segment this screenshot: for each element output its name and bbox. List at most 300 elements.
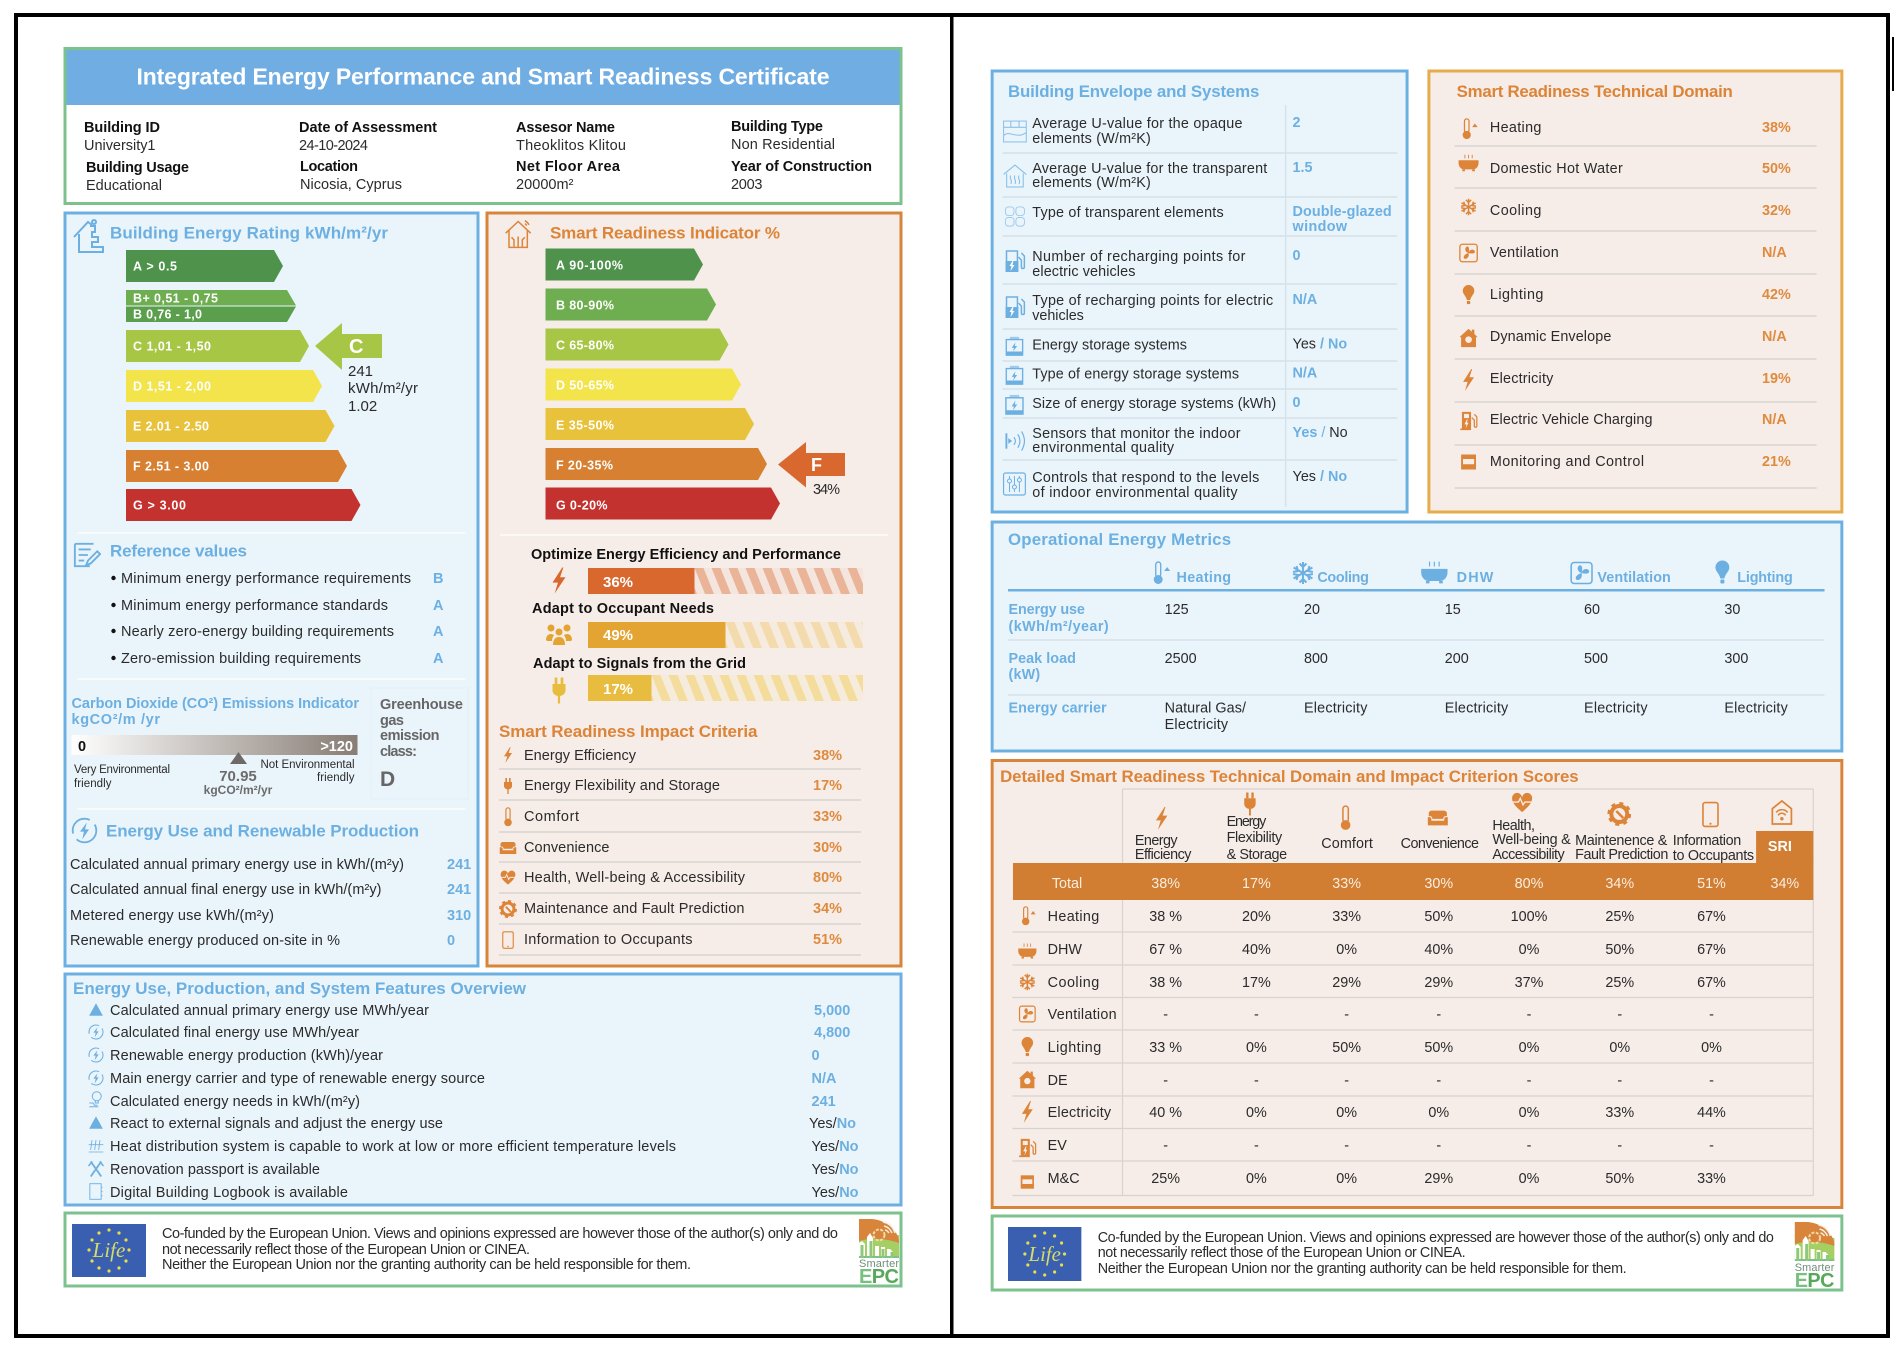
row: cooling: 17% [1242, 975, 1271, 991]
rating scale bars [126, 250, 360, 521]
SRI scale bars: G 0-20% [556, 499, 608, 513]
icon: Smarter EPC logo: EPC [1795, 1270, 1834, 1292]
CO2 emissions indicator: friendly [317, 772, 355, 784]
impact criteria list: 34% [813, 901, 842, 917]
row: heating: 38 % [1149, 909, 1182, 925]
row: cooling [1020, 974, 1726, 991]
panel: smart readiness indicator [487, 213, 901, 966]
overview rows: N/A [812, 1071, 837, 1087]
column headers with icons: Well-being & [1492, 832, 1571, 848]
SRI scale bars: E 35-50% [556, 419, 614, 433]
building details: University1 [84, 138, 156, 154]
building details [84, 119, 872, 194]
row: EV: - [1344, 1138, 1349, 1154]
building details: Building Type [731, 119, 823, 135]
energy use rows: Calculated annual primary energy use in kWh/(m²y) [70, 857, 404, 873]
icon: EU LIFE flag: Life [92, 1238, 125, 1262]
row: EV: - [1254, 1138, 1259, 1154]
technical domain rows: Ventilation [1490, 245, 1559, 261]
technical domain rows: Cooling [1490, 203, 1541, 219]
table header: Heating [1177, 570, 1231, 586]
row: heating: 67% [1697, 909, 1726, 925]
row: ventilation: - [1254, 1007, 1259, 1023]
envelope rows: Number of recharging points for [1032, 249, 1246, 265]
envelope rows: Type of energy storage systems [1032, 366, 1239, 383]
building details: 20000m² [516, 177, 574, 193]
reference values list: Nearly zero-energy building requirements [121, 624, 394, 640]
icon: reference note [75, 544, 100, 566]
building details: Non Residential [731, 137, 835, 153]
envelope rows: Controls that respond to the levels [1032, 470, 1259, 486]
building details: Nicosia, Cyprus [300, 177, 402, 193]
row: M&C: 25% [1151, 1171, 1180, 1187]
heading: smart readiness indicator: Smart Readiness Indicator % [550, 224, 780, 242]
row: lighting [1022, 1037, 1722, 1056]
row: energy use: (kWh/m²/year) [1008, 619, 1109, 635]
reference values list: Zero-emission building requirements [121, 651, 361, 667]
row: electricity: Electricity [1048, 1105, 1112, 1121]
overview rows: Yes/No [812, 1185, 859, 1201]
greenhouse gas emission class: Greenhouse [380, 697, 463, 713]
technical domain rows: 38% [1762, 120, 1791, 136]
envelope rows: Yes / No [1293, 336, 1347, 353]
building details: Theoklitos Klitou [516, 138, 626, 154]
row: cooling: 29% [1424, 975, 1453, 991]
row: ventilation: - [1617, 1007, 1622, 1023]
row: lighting: 0% [1246, 1040, 1267, 1056]
rating scale bars: C 1,01 - 1,50 [133, 340, 211, 354]
greenhouse gas emission class: emission [380, 728, 440, 744]
column headers with icons: Flexibility [1227, 830, 1283, 846]
row: energy carrier: Energy carrier [1008, 700, 1107, 717]
envelope rows: Yes / No [1293, 469, 1347, 485]
row: energy use [1008, 602, 1740, 635]
overview rows: Yes/No [812, 1139, 859, 1155]
CO2 emissions indicator: Carbon Dioxide (CO²) Emissions Indicator [72, 696, 359, 712]
disclaimer text: Co-funded by the European Union. Views and opinions expressed are however those of the author(s) only and do [1098, 1230, 1774, 1246]
technical domain rows: N/A [1762, 245, 1787, 261]
envelope rows: 2 [1293, 115, 1301, 131]
reference values list: A [433, 624, 444, 640]
heading: reference values: Reference values [110, 542, 247, 560]
row: heating: 50% [1424, 909, 1453, 925]
envelope rows: Size of energy storage systems (kWh) [1032, 396, 1276, 412]
row: EV: - [1436, 1138, 1441, 1154]
envelope rows: window [1292, 219, 1348, 235]
row: DHW: 0% [1519, 942, 1540, 958]
rating scale bars: F 2.51 - 3.00 [133, 460, 209, 474]
row: ventilation: - [1436, 1007, 1441, 1023]
row: heating: 33% [1332, 909, 1361, 925]
table header: DHW [1457, 570, 1494, 586]
energy use rows [70, 857, 471, 949]
technical domain rows: 19% [1762, 371, 1791, 387]
overview rows: Yes/No [809, 1116, 856, 1132]
technical domain rows: 21% [1762, 454, 1791, 470]
envelope rows: Average U-value for the opaque [1032, 116, 1242, 132]
row: EV: - [1527, 1138, 1532, 1154]
row: lighting: 50% [1332, 1040, 1361, 1056]
row: electricity: 40 % [1149, 1105, 1182, 1121]
chart: adapt to signals from the grid: 17% [603, 681, 633, 698]
disclaimer text: Co-funded by the European Union. Views and opinions expressed are however those of the author(s) only and do [162, 1226, 838, 1242]
chart: adapt to occupant needs: 49% [603, 627, 633, 644]
row: electricity: 0% [1246, 1105, 1267, 1121]
disclaimer text: Neither the European Union nor the granting authority can be held responsible for them. [1098, 1261, 1627, 1277]
greenhouse gas emission class: class: [380, 744, 417, 760]
SRI scale bars: B 80-90% [556, 299, 614, 313]
reference values list [111, 571, 444, 667]
row: ventilation: - [1344, 1007, 1349, 1023]
envelope rows: 0 [1293, 395, 1301, 411]
rating scale bars: G > 3.00 [133, 499, 186, 513]
energy use rows: Renewable energy produced on-site in % [70, 933, 340, 949]
overview rows: Yes/No [812, 1162, 859, 1178]
technical domain rows: Electricity [1490, 371, 1554, 387]
disclaimer text: not necessarily reflect those of the European Union or CINEA. [162, 1242, 530, 1258]
row: peak load: 200 [1445, 651, 1469, 667]
row: lighting: Lighting [1048, 1040, 1101, 1056]
column headers with icons: & Storage [1227, 847, 1287, 863]
energy use rows: 0 [447, 933, 455, 949]
row: DHW: 50% [1605, 942, 1634, 958]
disclaimer text [162, 1226, 838, 1273]
row: dynamic envelope: - [1254, 1073, 1259, 1089]
building details: Year of Construction [731, 159, 872, 175]
rating arrow: C [315, 323, 418, 415]
CO2 emissions indicator: 70.95 [219, 768, 257, 785]
rating scale bars: B 0,76 - 1,0 [133, 308, 202, 322]
impact criteria list: Energy Flexibility and Storage [524, 778, 720, 794]
envelope rows: of indoor environmental quality [1032, 485, 1238, 501]
row: ventilation: - [1163, 1007, 1168, 1023]
icon: Smarter EPC logo [859, 1219, 899, 1288]
row: energy carrier: Natural Gas/ [1165, 700, 1246, 717]
overview rows [88, 1003, 859, 1201]
overview rows: React to external signals and adjust the energy use [110, 1116, 443, 1132]
row: ventilation: - [1527, 1007, 1532, 1023]
chart: optimize energy efficiency [531, 547, 863, 594]
row: DHW: 0% [1336, 942, 1357, 958]
row: lighting: 0% [1701, 1040, 1722, 1056]
row: electricity [1022, 1101, 1726, 1123]
envelope rows: Sensors that monitor the indoor [1032, 426, 1241, 442]
table header: Lighting [1737, 570, 1793, 586]
building details: Building Usage [86, 160, 189, 176]
overview rows: Calculated final energy use MWh/year [110, 1025, 359, 1041]
panel: energy use, production and system features overview [65, 974, 901, 1205]
rating arrow: F [778, 442, 845, 498]
envelope rows: environmental quality [1032, 440, 1175, 456]
envelope rows: Double-glazed [1293, 204, 1392, 220]
disclaimer text: Neither the European Union nor the granting authority can be held responsible for them. [162, 1257, 691, 1273]
row: EV [1019, 1138, 1714, 1157]
row: DHW [1018, 942, 1726, 958]
CO2 emissions indicator [72, 696, 359, 797]
row: DHW: DHW [1048, 942, 1082, 958]
heading: overview: Energy Use, Production, and System Features Overview [73, 979, 527, 998]
heading: energy use and renewable production: Energy Use and Renewable Production [106, 822, 419, 840]
heading: building energy rating: Building Energy Rating kWh/m²/yr [110, 224, 388, 242]
row: EV: - [1709, 1138, 1714, 1154]
energy use rows: 310 [447, 908, 471, 924]
envelope rows: Yes / No [1293, 425, 1348, 441]
SRI scale bars: F 20-35% [556, 459, 613, 473]
technical domain rows: 50% [1762, 161, 1791, 177]
row: peak load [1008, 651, 1748, 683]
row: energy carrier: Electricity [1165, 717, 1229, 733]
CO2 emissions indicator: friendly [74, 778, 112, 790]
row: EV: - [1617, 1138, 1622, 1154]
column headers with icons: Accessibility [1492, 847, 1566, 863]
building details: Building ID [84, 120, 160, 136]
building details: Net Floor Area [516, 159, 621, 175]
row: electricity: 0% [1336, 1105, 1357, 1121]
rating scale bars: A > 0.5 [133, 260, 177, 274]
column headers with icons: Health, [1492, 818, 1535, 834]
icon: EU LIFE flag: Life [1027, 1242, 1061, 1266]
row: energy carrier: Electricity [1304, 700, 1368, 717]
building details: Educational [86, 178, 162, 194]
row: peak load: 500 [1584, 651, 1608, 667]
right page contents [992, 71, 1842, 1292]
overview rows: 0 [812, 1048, 820, 1064]
row: lighting: 33 % [1149, 1040, 1182, 1056]
envelope rows: Average U-value for the transparent [1032, 161, 1267, 177]
table header: Cooling [1317, 570, 1369, 586]
impact criteria list: Convenience [524, 840, 610, 856]
column headers with icons: Energy [1227, 814, 1267, 830]
row: peak load: 300 [1724, 651, 1748, 667]
technical domain rows: Heating [1490, 120, 1541, 136]
row: total: 80% [1515, 876, 1544, 892]
panel: building energy rating [65, 213, 478, 966]
impact criteria list: 38% [813, 748, 842, 764]
row: total: 17% [1242, 876, 1271, 892]
technical domain rows: N/A [1762, 329, 1787, 345]
row: heating: 20% [1242, 909, 1271, 925]
row: total: 51% [1697, 876, 1726, 892]
icon: Smarter EPC logo: EPC [859, 1266, 899, 1288]
row: electricity: 44% [1697, 1105, 1726, 1121]
row: ventilation: - [1709, 1007, 1714, 1023]
envelope rows: elements (W/m²K) [1032, 131, 1151, 147]
chart: optimize energy efficiency: Optimize Energy Efficiency and Performance [531, 547, 841, 563]
title: Integrated Energy Performance and Smart Readiness Certificate [136, 64, 830, 90]
rating arrow: C: 241 [348, 363, 373, 380]
impact criteria list: Information to Occupants [524, 932, 692, 948]
row: total: 34% [1605, 876, 1634, 892]
rating arrow: C: kWh/m²/yr [348, 380, 418, 397]
row: total [1013, 863, 1813, 900]
column headers with icons: Efficiency [1135, 847, 1192, 863]
impact criteria list: 51% [813, 932, 842, 948]
CO2 emissions indicator: Not Environmental [260, 759, 354, 771]
impact criteria list: 80% [813, 870, 842, 886]
CO2 emissions indicator: >120 [320, 739, 353, 755]
impact criteria list: 33% [813, 809, 842, 825]
overview rows: 4,800 [814, 1025, 850, 1041]
panel: certificate header [65, 48, 901, 204]
overview rows: Renovation passport is available [110, 1162, 320, 1178]
panel: footer right [992, 1216, 1842, 1292]
row: ventilation [1020, 1006, 1714, 1023]
column headers with icons [1135, 792, 1813, 864]
rating scale bars: D 1,51 - 2,00 [133, 380, 211, 394]
CO2 emissions indicator: kgCO²/m /yr [72, 712, 160, 728]
technical domain rows: N/A [1762, 412, 1787, 428]
icon: Smarter EPC logo: Smarter [1795, 1262, 1835, 1274]
row: dynamic envelope: - [1436, 1073, 1441, 1089]
building details: Date of Assessment [299, 120, 437, 136]
rating arrow: C: 1.02 [348, 398, 377, 415]
CO2 emissions indicator: Very Environmental [74, 764, 170, 776]
row: energy use: 30 [1724, 602, 1740, 618]
icon: EU LIFE flag [1008, 1227, 1081, 1281]
column headers with icons: Convenience [1401, 836, 1479, 852]
row: energy use: Energy use [1008, 602, 1085, 618]
technical domain rows [1459, 119, 1791, 470]
envelope rows: Type of transparent elements [1032, 205, 1224, 221]
row: dynamic envelope: - [1163, 1073, 1168, 1089]
row: cooling: 67% [1697, 975, 1726, 991]
heading: building envelope and systems: Building Envelope and Systems [1008, 82, 1259, 101]
CO2 emissions indicator: kgCO²/m²/yr [204, 783, 273, 797]
envelope rows: N/A [1293, 365, 1318, 382]
impact criteria list [499, 747, 861, 955]
building details: 24-10-2024 [299, 138, 368, 154]
row: heating [1022, 907, 1726, 925]
SRI scale bars: C 65-80% [556, 339, 614, 353]
row: cooling: Cooling [1048, 975, 1099, 991]
envelope rows: electric vehicles [1032, 264, 1135, 280]
envelope rows: elements (W/m²K) [1032, 175, 1151, 191]
building details: 2003 [731, 177, 762, 193]
impact criteria list: Health, Well-being & Accessibility [524, 870, 746, 886]
row: DHW: 67% [1697, 942, 1726, 958]
envelope rows: Type of recharging points for electric [1032, 293, 1273, 309]
row: cooling: 37% [1515, 975, 1544, 991]
chart: adapt to signals from the grid [533, 656, 863, 704]
icon: energy cycle [73, 819, 96, 842]
row: EV: EV [1048, 1138, 1067, 1154]
row: M&C: 29% [1424, 1171, 1453, 1187]
chart: optimize energy efficiency: 36% [603, 574, 633, 591]
table header: Ventilation [1597, 570, 1671, 586]
rating scale bars: E 2.01 - 2.50 [133, 420, 209, 434]
row: total: 38% [1151, 876, 1180, 892]
overview rows: Calculated energy needs in kWh/(m²y) [110, 1094, 360, 1110]
row: electricity: 0% [1428, 1105, 1449, 1121]
row: lighting: 0% [1609, 1040, 1630, 1056]
envelope rows: N/A [1293, 292, 1318, 308]
panel: detailed scores [992, 760, 1842, 1208]
technical domain rows: 42% [1762, 287, 1791, 303]
row: M&C: 50% [1605, 1171, 1634, 1187]
reference values list: B [433, 571, 443, 587]
heading: smart readiness impact criteria: Smart Readiness Impact Criteria [499, 722, 758, 741]
row: lighting: 50% [1424, 1040, 1453, 1056]
row: M&C: 0% [1246, 1171, 1267, 1187]
row: EV: - [1163, 1138, 1168, 1154]
impact criteria list: Energy Efficiency [524, 748, 637, 764]
row: electricity: 33% [1605, 1105, 1634, 1121]
technical domain rows: 32% [1762, 203, 1791, 219]
technical domain rows: Lighting [1490, 287, 1543, 303]
impact criteria list: Comfort [524, 809, 579, 825]
column headers with icons: SRI [1768, 839, 1792, 855]
technical domain rows: Dynamic Envelope [1490, 329, 1611, 345]
row: dynamic envelope: - [1617, 1073, 1622, 1089]
icon: building [74, 220, 103, 252]
row: energy use: 20 [1304, 602, 1320, 618]
technical domain rows: Domestic Hot Water [1490, 161, 1623, 177]
greenhouse gas emission class: D [380, 768, 395, 791]
column headers with icons: to Occupants [1673, 848, 1754, 864]
column headers with icons: Maintenence & [1575, 833, 1668, 849]
row: total: 30% [1424, 876, 1453, 892]
greenhouse gas emission class [371, 688, 468, 799]
row: DHW: 40% [1242, 942, 1271, 958]
SRI scale bars: D 50-65% [556, 379, 614, 393]
row: M&C: M&C [1048, 1171, 1080, 1187]
overview rows: Calculated annual primary energy use MWh/year [110, 1003, 429, 1019]
row: DHW: 40% [1424, 942, 1453, 958]
chart: adapt to signals from the grid: Adapt to Signals from the Grid [533, 656, 746, 672]
row: energy use: 15 [1445, 602, 1461, 618]
envelope rows [1004, 115, 1392, 501]
building details: Location [300, 159, 358, 175]
row: M&C: 33% [1697, 1171, 1726, 1187]
technical domain rows: Monitoring and Control [1490, 454, 1644, 470]
row: M&C: 0% [1519, 1171, 1540, 1187]
greenhouse gas emission class: gas [380, 713, 404, 729]
impact criteria list: 17% [813, 778, 842, 794]
row: energy carrier: Electricity [1584, 700, 1648, 717]
row: heating: 100% [1511, 909, 1548, 925]
row: peak load: Peak load [1008, 651, 1076, 667]
energy use rows: 241 [447, 882, 471, 898]
panel: operational energy metrics [992, 522, 1842, 751]
column headers with icons: Energy [1135, 833, 1178, 849]
row: peak load: (kW) [1008, 667, 1040, 683]
reference values list: A [433, 598, 444, 614]
column headers with icons: Comfort [1321, 836, 1373, 852]
row: energy use: 125 [1165, 602, 1189, 618]
row: dynamic envelope: DE [1048, 1073, 1068, 1089]
row: heating: 25% [1605, 909, 1634, 925]
overview rows: Renewable energy production (kWh)/year [110, 1048, 383, 1064]
icon: smart home [506, 221, 531, 247]
energy use rows: Metered energy use kWh/(m²y) [70, 908, 274, 924]
overview rows: Heat distribution system is capable to work at low or more efficient temperature levels [110, 1139, 676, 1155]
table header [1008, 560, 1825, 592]
reference values list: Minimum energy performance requirements [121, 571, 411, 587]
heading: operational energy metrics: Operational Energy Metrics [1008, 530, 1231, 549]
row: dynamic envelope: - [1527, 1073, 1532, 1089]
row: lighting: 0% [1519, 1040, 1540, 1056]
reference values list: A [433, 651, 444, 667]
heading: technical domain: Smart Readiness Technical Domain [1457, 82, 1733, 101]
impact criteria list: Maintenance and Fault Prediction [524, 901, 744, 917]
panel: building envelope and systems [992, 71, 1407, 512]
reference values list: Minimum energy performance standards [121, 598, 388, 614]
row: peak load: 800 [1304, 651, 1328, 667]
envelope rows: vehicles [1032, 308, 1084, 324]
building details: Assesor Name [516, 120, 615, 136]
row: ventilation: Ventilation [1048, 1007, 1117, 1023]
disclaimer text: not necessarily reflect those of the European Union or CINEA. [1098, 1245, 1466, 1261]
